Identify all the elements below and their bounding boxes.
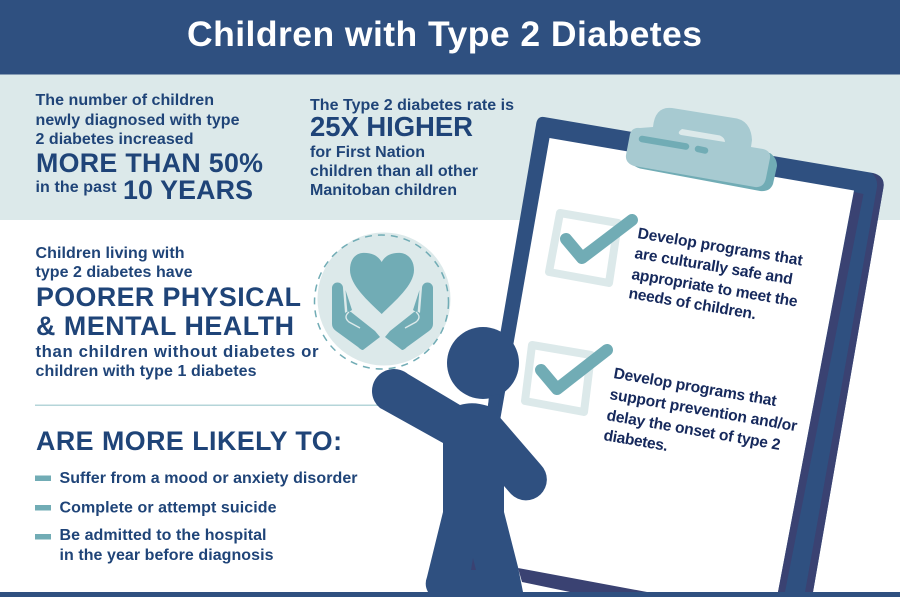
text block: more than 50 percent statistic: 2 diabetes increased [36,131,194,148]
text block: poorer physical and mental health: Children living with [36,245,184,262]
checkbox 1 [549,213,632,283]
text block: poorer physical and mental health: than children without diabetes or [36,342,319,361]
text block: 25X higher statistic: Manitoban children [310,182,457,199]
text: prevention programs: support prevention and/or [608,386,798,435]
bullet item: hospital admission [35,527,274,564]
text: prevention programs: diabetes. [602,427,669,455]
clipboard clip [626,108,777,191]
body and arms [372,369,547,592]
text: prevention programs: Develop programs that [612,365,778,410]
text block: poorer physical and mental health [36,245,319,380]
text block: more than 50 percent statistic: newly diagnosed with type [36,112,240,129]
text: culturally safe programs: are culturally safe and [633,245,794,288]
text block: 25X higher statistic: The Type 2 diabetes rate is [310,97,514,114]
text block: 25X higher statistic [310,97,514,199]
text block: 25X higher statistic: for First Nation [310,144,425,161]
text block: more than 50 percent statistic [36,92,263,205]
clipboard [456,108,884,592]
title: Children with Type 2 Diabetes [187,14,702,54]
bullet item: mood or anxiety disorder: Suffer from a mood or anxiety disorder [60,470,358,487]
text block: poorer physical and mental health: POORER PHYSICAL [36,282,301,312]
text: culturally safe programs: appropriate to meet the [630,266,799,311]
icon: hands holding heart [314,232,450,369]
text block: more than 50 percent statistic: The number of children [36,92,214,109]
text block: more than 50 percent statistic: in the past [36,179,117,196]
header banner [0,0,900,74]
text: culturally safe programs: Develop programs that [636,225,804,270]
checkbox 2 [525,345,607,412]
text block: poorer physical and mental health: children with type 1 diabetes [36,363,257,380]
head [447,327,519,399]
text block: 25X higher statistic: 25X HIGHER [310,111,473,142]
bullet item: suicide: Complete or attempt suicide [60,500,277,516]
list: outcomes [35,470,358,564]
text: prevention programs: delay the onset of type 2 [605,407,782,454]
text: culturally safe programs: needs of children. [627,285,757,323]
text block: more than 50 percent statistic: MORE THAN 50% [36,148,263,178]
bullet item: hospital admission: Be admitted to the hospital [60,527,266,544]
person figure pointing at clipboard [372,327,547,592]
text: prevention programs [602,365,798,455]
text: culturally safe programs [627,225,804,323]
bullet item: hospital admission: in the year before diagnosis [60,547,274,564]
heading: are more likely to: ARE MORE LIKELY TO: [36,426,342,456]
text block: more than 50 percent statistic: 10 YEARS [123,175,253,205]
text block: poorer physical and mental health: & MENTAL HEALTH [36,311,294,341]
text block: 25X higher statistic: children than all other [310,163,478,180]
text block: poorer physical and mental health: type 2 diabetes have [36,264,193,281]
